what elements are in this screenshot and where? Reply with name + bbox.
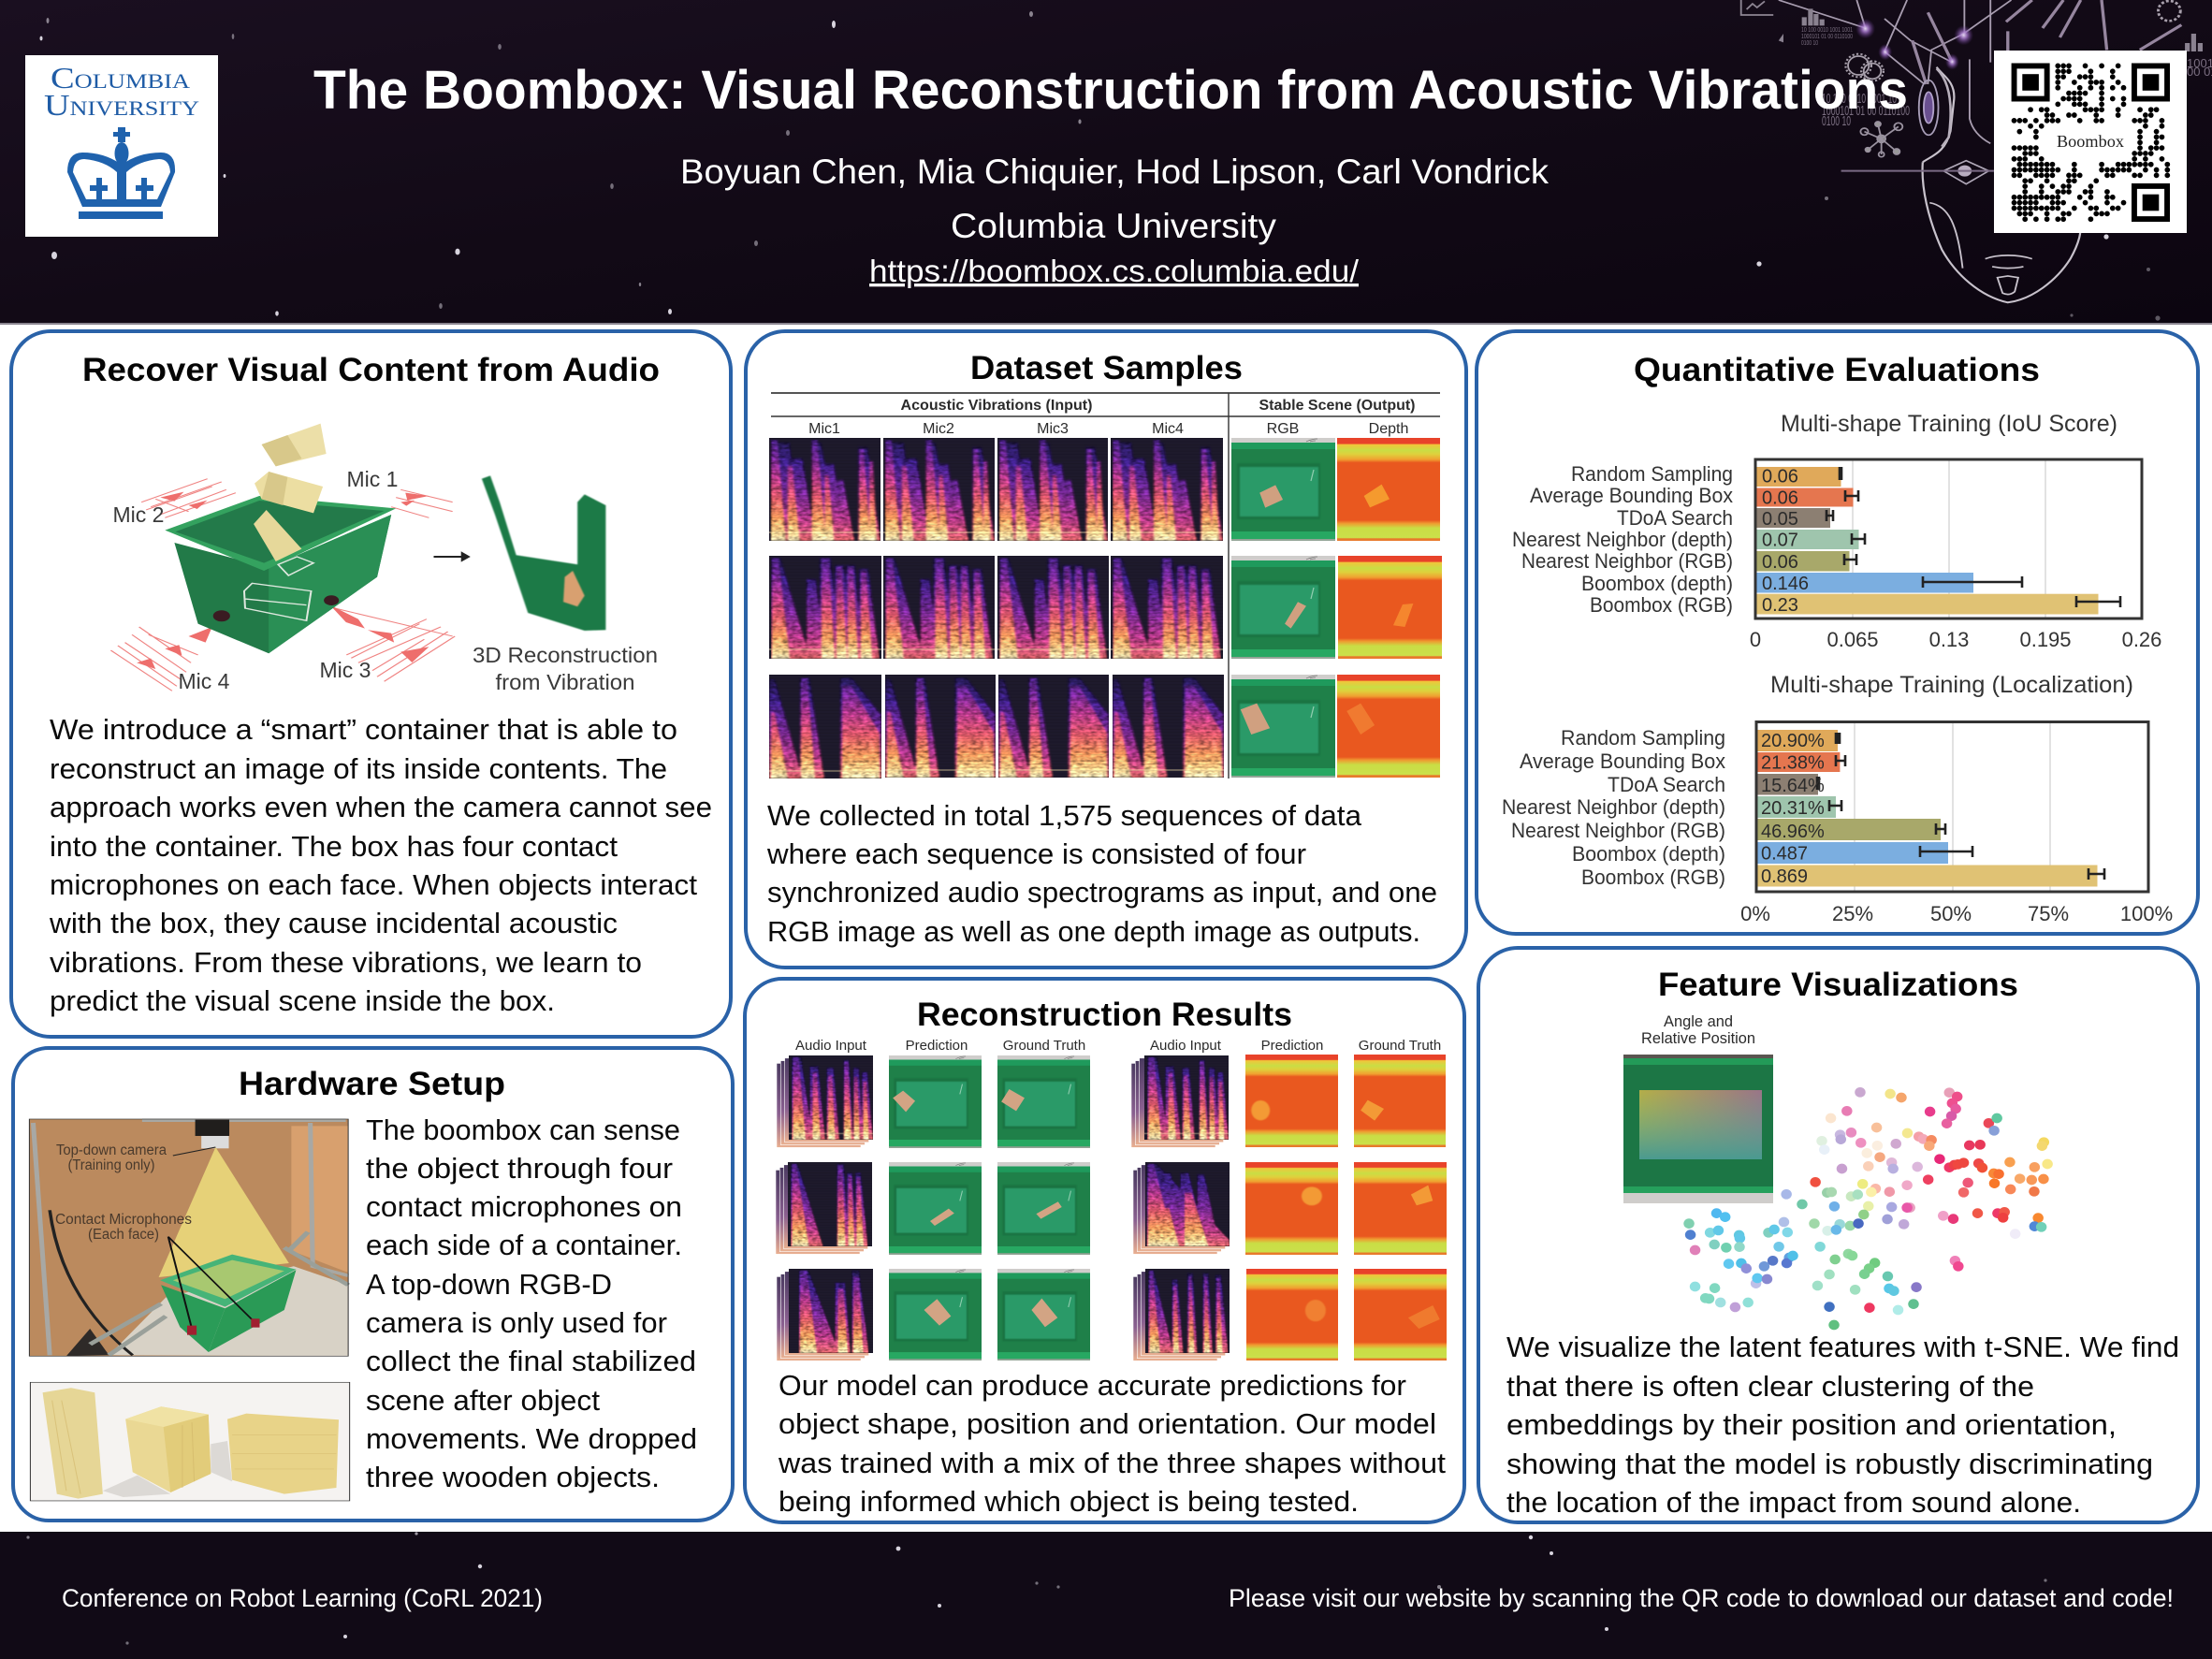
bar chart: localization: Boombox (depth) [1572, 842, 1725, 866]
text block: the location of the impact from sound alone. [1506, 1486, 2081, 1519]
bar chart: localization: 20.90% [1761, 731, 1825, 751]
bar chart: localization: Multi-shape Training (Localization) [1770, 672, 2133, 698]
panel: Dataset Samples [746, 331, 1466, 968]
text block: with the box, they cause incidental acoustic [49, 907, 618, 939]
illustration: green box with microphones and 3D reconstruction: from Vibration [496, 670, 634, 694]
call to action: Please visit our website by scanning the QR code to download our dataset and code! [1229, 1584, 2174, 1612]
icon: crown [67, 127, 175, 219]
bar chart: IoU score: 0.05 [1762, 509, 1798, 530]
binary text decoration: 10 100 0010 1001 10 [1822, 91, 1897, 107]
sample table header [771, 393, 1440, 779]
bar chart: localization: 0.487 [1761, 844, 1808, 865]
bar chart: IoU score: Boombox (RGB) [1590, 593, 1733, 617]
text block: where each sequence is consisted of four [766, 837, 1306, 870]
image: angle and relative position colour map: Relative Position [1641, 1029, 1755, 1047]
column labels: Ground Truth [1003, 1038, 1085, 1054]
text block: the object through four [366, 1152, 673, 1185]
heading: Hardware Setup [239, 1066, 505, 1102]
binary text decoration: 0100 10 [1801, 40, 1818, 47]
text block: was trained with a mix of the three shapes without [778, 1447, 1446, 1479]
bar chart: localization: Nearest Neighbor (RGB) [1511, 819, 1725, 842]
bar chart: IoU score: Multi-shape Training (IoU Score) [1781, 411, 2117, 437]
bar chart: localization: 25% [1832, 902, 1873, 925]
bar chart: localization: 0% [1740, 902, 1770, 925]
RGB and depth outputs [1231, 438, 1442, 778]
website link: https://boombox.cs.columbia.edu/ [869, 254, 1360, 288]
illustration: green box with microphones and 3D reconstruction: 3D Reconstruction [473, 643, 658, 667]
text block: object shape, position and orientation. Our model [779, 1407, 1436, 1440]
text block: predict the visual scene inside the box. [50, 984, 555, 1017]
column labels: Audio Input [795, 1038, 867, 1054]
illustration: green box with microphones and 3D reconstruction: Mic 4 [179, 669, 230, 693]
bar chart: IoU score: 0.13 [1929, 628, 1969, 651]
bar chart: localization: 50% [1930, 902, 1972, 925]
text block: collect the final stabilized [366, 1345, 696, 1377]
text block: Our model can produce accurate predictions for [779, 1369, 1406, 1402]
bar chart: localization: 15.64% [1761, 776, 1825, 796]
logo: Columbia University: Columbia [51, 61, 190, 95]
bar chart: IoU score: Nearest Neighbor (RGB) [1521, 549, 1733, 573]
column labels [795, 1038, 1441, 1054]
bar chart: IoU score: 0 [1750, 628, 1761, 651]
heading: Quantitative Evaluations [1634, 352, 2040, 388]
text block: into the container. The box has four contact [50, 830, 618, 863]
illustration: green box with microphones and 3D reconstruction: Mic 1 [347, 467, 398, 491]
bar chart: localization: 100% [2120, 902, 2173, 925]
binary text decoration: 0100 10 [1822, 113, 1851, 129]
bar chart: IoU score: 0.06 [1762, 466, 1798, 487]
text block: camera is only used for [366, 1306, 667, 1339]
panel: Feature Visualizations [1478, 948, 2198, 1522]
authors: Boyuan Chen, Mia Chiquier, Hod Lipson, Carl Vondrick [680, 153, 1550, 191]
logo: Columbia University [25, 55, 218, 237]
text block [766, 799, 1437, 948]
text block: showing that the model is robustly discriminating [1506, 1448, 2153, 1480]
stars background [39, 11, 2161, 321]
sample table header: Mic4 [1152, 421, 1184, 437]
text block: synchronized audio spectrograms as input, and one [767, 876, 1437, 909]
photo: three wooden objects [30, 1382, 350, 1501]
bar chart: IoU score: 0.07 [1762, 530, 1798, 550]
bar chart: IoU score: 0.146 [1762, 574, 1809, 594]
heading: Feature Visualizations [1658, 967, 2018, 1003]
panel: Recover Visual Content from Audio [11, 331, 731, 1037]
binary text decoration: 1000101 01 00 0110100 [1822, 103, 1910, 119]
text block [778, 1369, 1446, 1518]
header band [0, 0, 2212, 325]
text block: embeddings by their position and orientation, [1506, 1408, 2117, 1441]
text block: The boombox can sense [366, 1113, 680, 1146]
bar chart: localization: 21.38% [1761, 752, 1825, 773]
bar chart: IoU score: Boombox (depth) [1581, 572, 1733, 595]
photo: hardware rig: (Each face) [88, 1227, 159, 1243]
text block [49, 713, 712, 1017]
footer band [0, 1532, 2212, 1659]
scatter plot: t-SNE embedding [1683, 1087, 2053, 1330]
bar chart: IoU score: Nearest Neighbor (depth) [1512, 528, 1733, 551]
title: The Boombox: Visual Reconstruction from Acoustic Vibrations [313, 60, 1908, 121]
column labels: Audio Input [1150, 1038, 1222, 1054]
conference name: Conference on Robot Learning (CoRL 2021) [62, 1584, 543, 1612]
bar chart: IoU score: 0.065 [1826, 628, 1879, 651]
photo: hardware rig: (Training only) [67, 1157, 155, 1173]
binary text decoration [1801, 27, 2212, 129]
bar chart: IoU score: Average Bounding Box [1530, 484, 1733, 507]
bar chart: localization: 0.869 [1761, 866, 1808, 887]
bar chart: localization: Average Bounding Box [1520, 749, 1725, 773]
panel: Reconstruction Results [745, 979, 1464, 1522]
photo: hardware rig: Top-down camera [56, 1142, 167, 1158]
bar chart: IoU score: 0.06 [1762, 488, 1798, 508]
robot face line art [1741, 0, 2203, 302]
bar chart: IoU score: 0.195 [2019, 628, 2072, 651]
RGB predictions and ground truth [889, 1055, 1090, 1361]
bar chart: IoU score: 0.26 [2122, 628, 2161, 651]
affiliation: Columbia University [951, 207, 1277, 245]
illustration: green box with microphones and 3D reconstruction [110, 424, 658, 694]
photo: hardware rig: Contact Microphones [55, 1212, 192, 1228]
sample table header: Depth [1369, 421, 1408, 437]
text block [1506, 1331, 2179, 1519]
QR code [1994, 51, 2187, 233]
heading: Reconstruction Results [917, 997, 1292, 1033]
bar chart: IoU score: Random Sampling [1571, 462, 1733, 486]
bar chart: IoU score: 0.06 [1762, 552, 1798, 573]
text block: approach works even when the camera cannot see [50, 791, 712, 823]
sample table header: Mic1 [808, 421, 840, 437]
text block: that there is often clear clustering of the [1506, 1370, 2034, 1403]
sample table header: RGB [1267, 421, 1299, 437]
bar chart: localization: Random Sampling [1561, 726, 1725, 749]
bar chart: localization: Boombox (RGB) [1581, 866, 1725, 889]
photo: hardware rig [29, 1119, 348, 1356]
sample table header: Mic2 [923, 421, 954, 437]
panel: Hardware Setup [13, 1048, 733, 1521]
audio input stacks [776, 1055, 1230, 1361]
bar chart: localization: Nearest Neighbor (depth) [1502, 795, 1725, 819]
text block: movements. We dropped [366, 1422, 697, 1455]
depth predictions and ground truth [1245, 1055, 1447, 1361]
bar chart: IoU score [1512, 411, 2161, 651]
image: angle and relative position colour map [1623, 1012, 1773, 1203]
binary text decoration: 1000101 01 00 0110100 [1801, 34, 1853, 40]
text block: scene after object [366, 1384, 600, 1417]
bar chart: localization: 20.31% [1761, 798, 1825, 819]
bar chart: localization: 75% [2028, 902, 2069, 925]
column labels: Prediction [1261, 1038, 1323, 1054]
text block: We visualize the latent features with t-SNE. We find [1506, 1331, 2179, 1363]
column labels: Ground Truth [1359, 1038, 1441, 1054]
binary text decoration: 10 100 0010 1001 1001 [1801, 27, 1853, 34]
heading: Recover Visual Content from Audio [82, 352, 660, 388]
sample table header: Acoustic Vibrations (Input) [900, 398, 1093, 414]
panel: Quantitative Evaluations [1477, 331, 2198, 934]
QR code: Boombox [2057, 132, 2124, 151]
bar chart: IoU score: TDoA Search [1617, 506, 1733, 530]
text block: reconstruct an image of its inside contents. The [50, 752, 667, 785]
text block: each side of a container. [366, 1229, 682, 1261]
text block: microphones on each face. When objects interact [50, 868, 697, 901]
bar chart: localization: TDoA Search [1608, 773, 1725, 796]
bar chart: IoU score: 0.23 [1762, 595, 1798, 616]
text block: We collected in total 1,575 sequences of data [767, 799, 1362, 832]
text block: vibrations. From these vibrations, we learn to [50, 946, 642, 979]
stars background [26, 1532, 2047, 1645]
text block [366, 1113, 697, 1493]
heading: Dataset Samples [970, 350, 1243, 386]
logo: Columbia University: University [44, 88, 199, 122]
text block: We introduce a “smart” container that is able to [50, 713, 677, 746]
sample table header: Mic3 [1037, 421, 1069, 437]
column labels: Prediction [906, 1038, 968, 1054]
bar chart: localization: 46.96% [1761, 822, 1825, 842]
bar chart: localization [1502, 672, 2173, 925]
text block: A top-down RGB-D [366, 1268, 612, 1301]
text block: being informed which object is being tested. [779, 1485, 1359, 1518]
text block: contact microphones on [366, 1190, 682, 1223]
image: angle and relative position colour map: Angle and [1664, 1012, 1733, 1030]
sample table header: Stable Scene (Output) [1259, 398, 1415, 414]
illustration: green box with microphones and 3D reconstruction: Mic 3 [320, 658, 371, 682]
illustration: green box with microphones and 3D reconstruction: Mic 2 [113, 502, 164, 527]
text block: RGB image as well as one depth image as outputs. [767, 915, 1420, 948]
spectrogram grid [769, 438, 1224, 779]
text block: three wooden objects. [366, 1461, 660, 1493]
